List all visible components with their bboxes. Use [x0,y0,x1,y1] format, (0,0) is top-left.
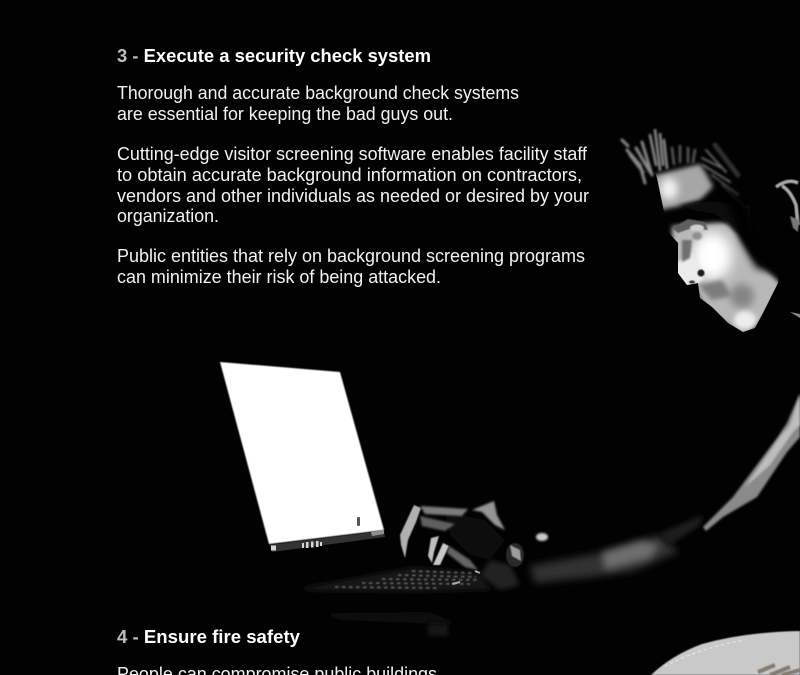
wristwatch [506,543,524,567]
text block: screening software paragraph: Cutting-edge visitor screening software enables facility staff [117,144,588,164]
text block: intro paragraph: Thorough and accurate background check systems [117,83,519,103]
heading: step 3: 3 - Execute a security check system [117,45,431,66]
moustache and beard [698,280,732,300]
keyboard deck [300,567,492,592]
cursor on screen [357,517,360,526]
photo: shoulder and arm [530,393,800,583]
cheek and jaw [672,222,782,338]
forehead [652,164,714,210]
text block: intro paragraph [117,83,519,124]
brow shadow [678,200,746,234]
palm shadow [445,512,505,560]
hair [622,130,745,208]
face [652,164,782,338]
text block: intro paragraph: are essential for keeping the bad guys out. [117,104,453,124]
taskbar [270,531,385,552]
nose side shadow [682,240,692,262]
text block: public entities paragraph: can minimize their risk of being attacked. [117,267,441,287]
table reflection [322,612,460,625]
temple shadow [708,175,775,272]
text block: public entities paragraph: Public entities that rely on background screening programs [117,246,585,266]
ear [776,181,798,225]
text block: screening software paragraph: organization. [117,206,219,226]
photo: man's face in profile [622,130,800,338]
text block: public entities paragraph [117,246,585,287]
photo: smoke detector [651,631,800,675]
heading: step 4: 4 - Ensure fire safety [117,626,301,647]
photo: laptop [220,362,492,636]
keys [335,571,478,588]
laptop screen [220,362,384,544]
text block: screening software paragraph [117,144,589,226]
text block: screening software paragraph: to obtain accurate background information on contractors, [117,165,582,185]
eye [672,219,708,233]
photo: hands on keyboard [400,501,548,590]
text block: screening software paragraph: vendors and other individuals as needed or desired by your [117,186,589,206]
nostril [698,270,704,276]
